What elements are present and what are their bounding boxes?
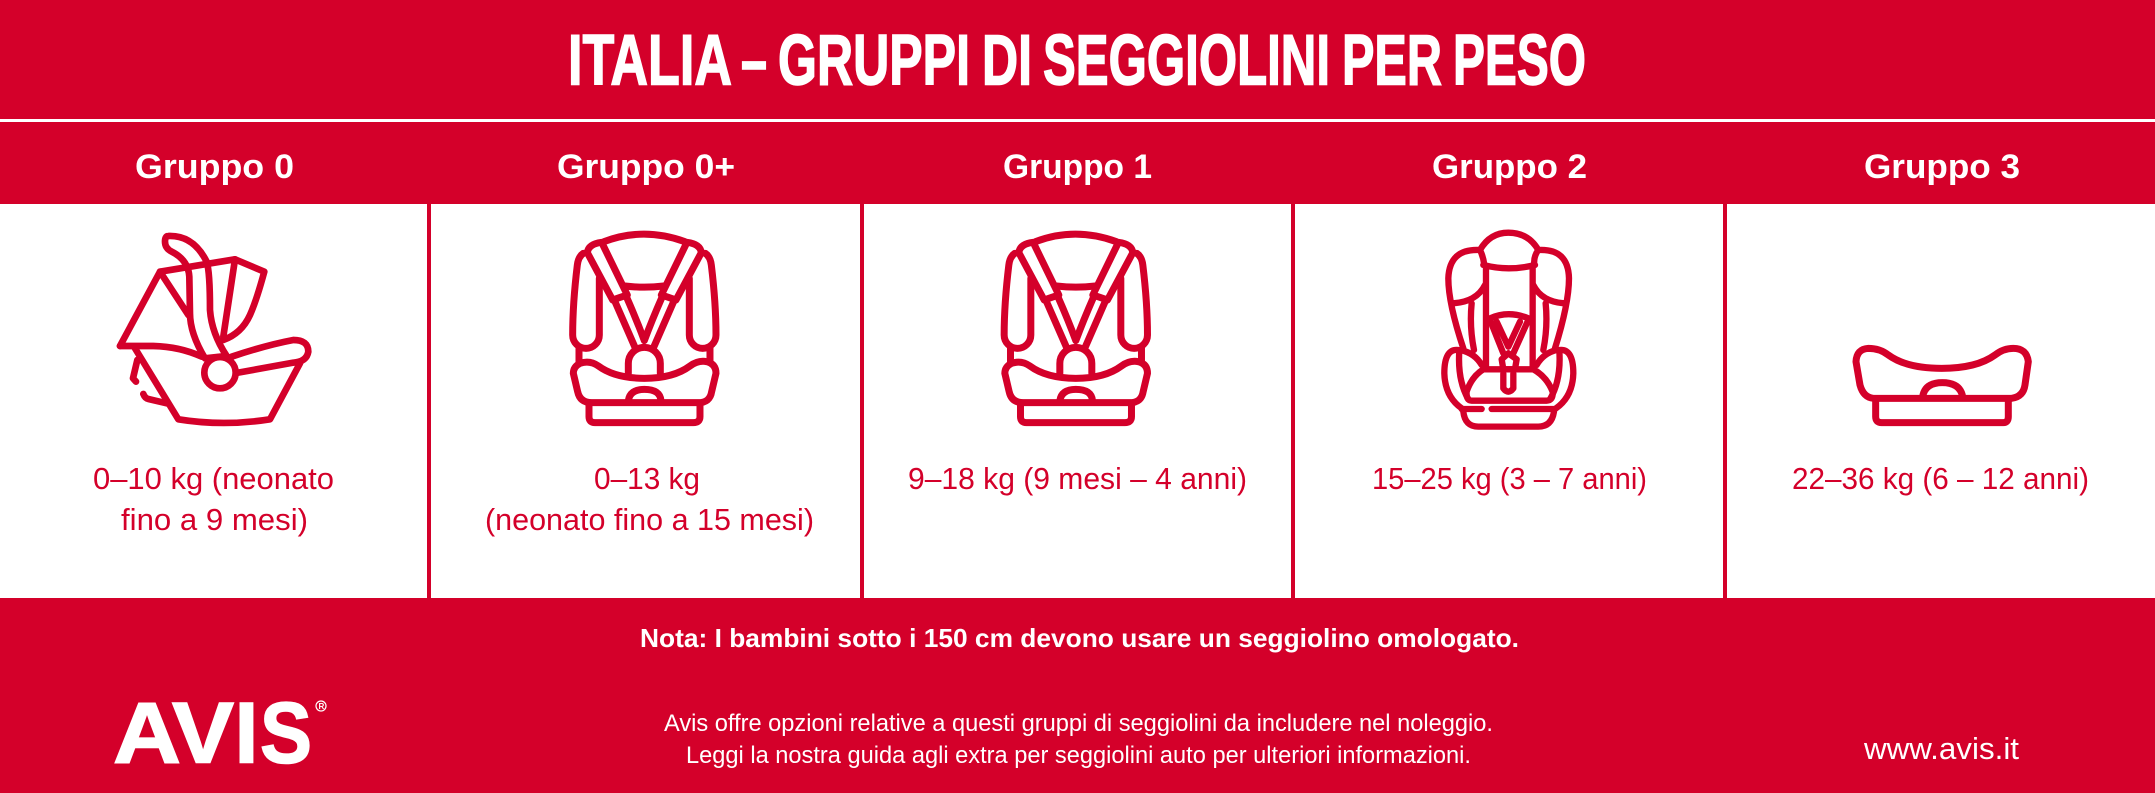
weight label: 22–36 kg (6 – 12 anni) [1792, 461, 2089, 496]
icon: child seat with harness [1004, 234, 1147, 423]
panel: Gruppo 0 [93, 148, 334, 537]
logo: AVIS: R [318, 702, 324, 711]
heading: Gruppo 3: Gruppo 3 [1864, 148, 2020, 186]
logo: AVIS: I [234, 686, 258, 782]
title: ITALIA [568, 22, 732, 101]
column dividers [427, 204, 1727, 598]
heading: Gruppo 0+: Gruppo 0+ [557, 148, 735, 186]
footer text: Avis offre opzioni relative a questi gruppi di seggiolini da includere nel noleggio. [664, 710, 1493, 737]
logo: AVIS: A [113, 686, 181, 782]
heading: Gruppo 2: Gruppo 2 [1432, 148, 1587, 186]
title: GRUPPI [778, 22, 970, 101]
website: www.avis.it [1863, 731, 2019, 766]
logo: AVIS [113, 686, 326, 782]
weight label: 15–25 kg (3 – 7 anni) [1372, 461, 1647, 496]
heading: Gruppo 1: Gruppo 1 [1003, 148, 1152, 186]
title divider [0, 119, 2155, 122]
logo: AVIS: S [260, 686, 312, 782]
heading: Gruppo 0: Gruppo 0 [135, 148, 294, 186]
weight label: 0–13 kg [594, 461, 700, 496]
title: PESO [1453, 22, 1586, 101]
note: Nota: I bambini sotto i 150 cm devono usare un seggiolino omologato. [640, 623, 1519, 653]
panel: Gruppo 2 [1372, 148, 1647, 496]
panel: Gruppo 0+ [485, 148, 814, 537]
title: PER [1342, 22, 1442, 101]
title: – [741, 22, 767, 101]
weight label: 9–18 kg (9 mesi – 4 anni) [908, 461, 1247, 496]
title [568, 22, 1586, 101]
icon: high-back booster seat [1444, 233, 1573, 427]
panel: Gruppo 1 [908, 148, 1247, 496]
weight label: 0–10 kg (neonato [93, 461, 334, 496]
icon: infant carrier [120, 236, 308, 423]
weight label: fino a 9 mesi) [121, 502, 308, 537]
footer text: Leggi la nostra guida agli extra per seggiolini auto per ulteriori informazioni. [686, 742, 1471, 769]
panel: Gruppo 3 [1792, 148, 2089, 496]
weight label: (neonato fino a 15 mesi) [485, 502, 814, 537]
logo: AVIS: V [172, 686, 234, 782]
icon: child seat with harness [573, 234, 716, 423]
title: DI [982, 22, 1032, 101]
icon: booster cushion [1856, 348, 2028, 423]
title: SEGGIOLINI [1043, 22, 1330, 101]
panel: white table body [0, 204, 2155, 598]
